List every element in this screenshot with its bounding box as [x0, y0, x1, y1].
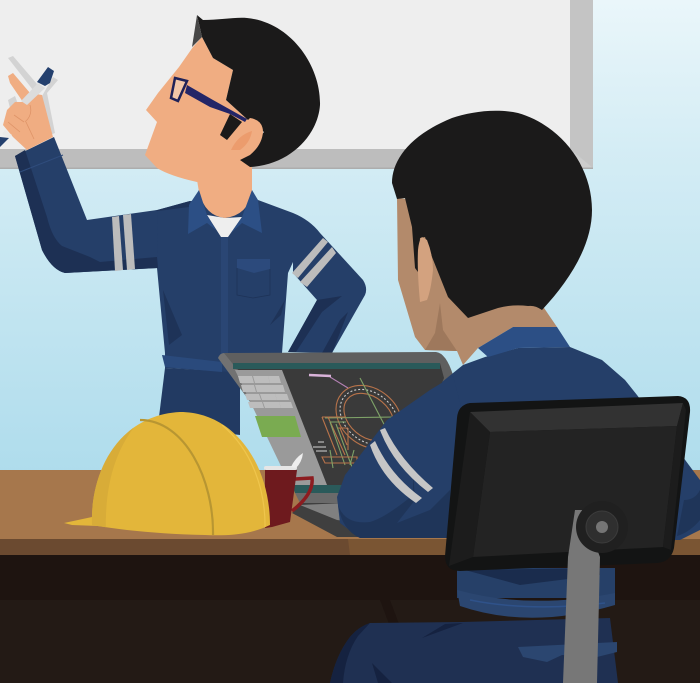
collar	[478, 327, 570, 357]
right arm stripes	[292, 238, 336, 287]
sideburn	[220, 114, 242, 140]
desk	[0, 470, 700, 683]
white undershirt	[207, 215, 242, 237]
office chair	[445, 396, 690, 683]
sleeve underside fold	[338, 470, 450, 538]
sleeve stripes	[370, 428, 433, 503]
collar	[188, 190, 262, 234]
hand finger creases	[8, 105, 34, 139]
right arm	[288, 213, 366, 353]
marker	[0, 67, 54, 147]
pen shadow	[8, 56, 58, 135]
waist	[457, 568, 615, 598]
ear	[418, 237, 433, 302]
trousers	[330, 618, 618, 683]
torso folds	[163, 290, 182, 345]
back of shirt	[442, 347, 700, 540]
CAD drawing	[309, 372, 415, 468]
hard hat	[64, 412, 270, 536]
laptop	[218, 352, 453, 537]
neck shadow	[425, 303, 457, 351]
panel keys	[238, 376, 293, 408]
screen	[233, 363, 444, 485]
trouser pocket	[518, 642, 617, 662]
seated engineer	[330, 111, 700, 683]
chair knob	[576, 501, 628, 553]
right elbow	[677, 463, 700, 536]
glasses	[171, 78, 247, 122]
wall background	[0, 0, 700, 480]
hair	[392, 111, 592, 318]
green panel button	[255, 416, 301, 437]
head skin	[397, 198, 557, 365]
coffee mug	[264, 453, 312, 528]
standing engineer	[0, 15, 366, 435]
ear	[230, 118, 263, 160]
screen frame	[224, 352, 453, 503]
hair	[197, 15, 320, 167]
forearm sleeve	[337, 376, 470, 538]
neck	[197, 150, 252, 218]
belt	[162, 355, 222, 372]
screen lower bezel	[292, 485, 450, 493]
trousers	[158, 368, 240, 435]
whiteboard	[0, 0, 593, 169]
placket	[221, 237, 228, 362]
face	[145, 37, 248, 182]
hand	[3, 73, 53, 150]
left arm stripes	[112, 214, 135, 271]
side panel	[235, 370, 327, 485]
chest pocket	[237, 259, 270, 298]
keyboard base	[292, 503, 400, 537]
left arm	[15, 137, 158, 273]
torso	[150, 200, 293, 375]
belt	[457, 590, 615, 618]
chair post	[563, 510, 600, 683]
